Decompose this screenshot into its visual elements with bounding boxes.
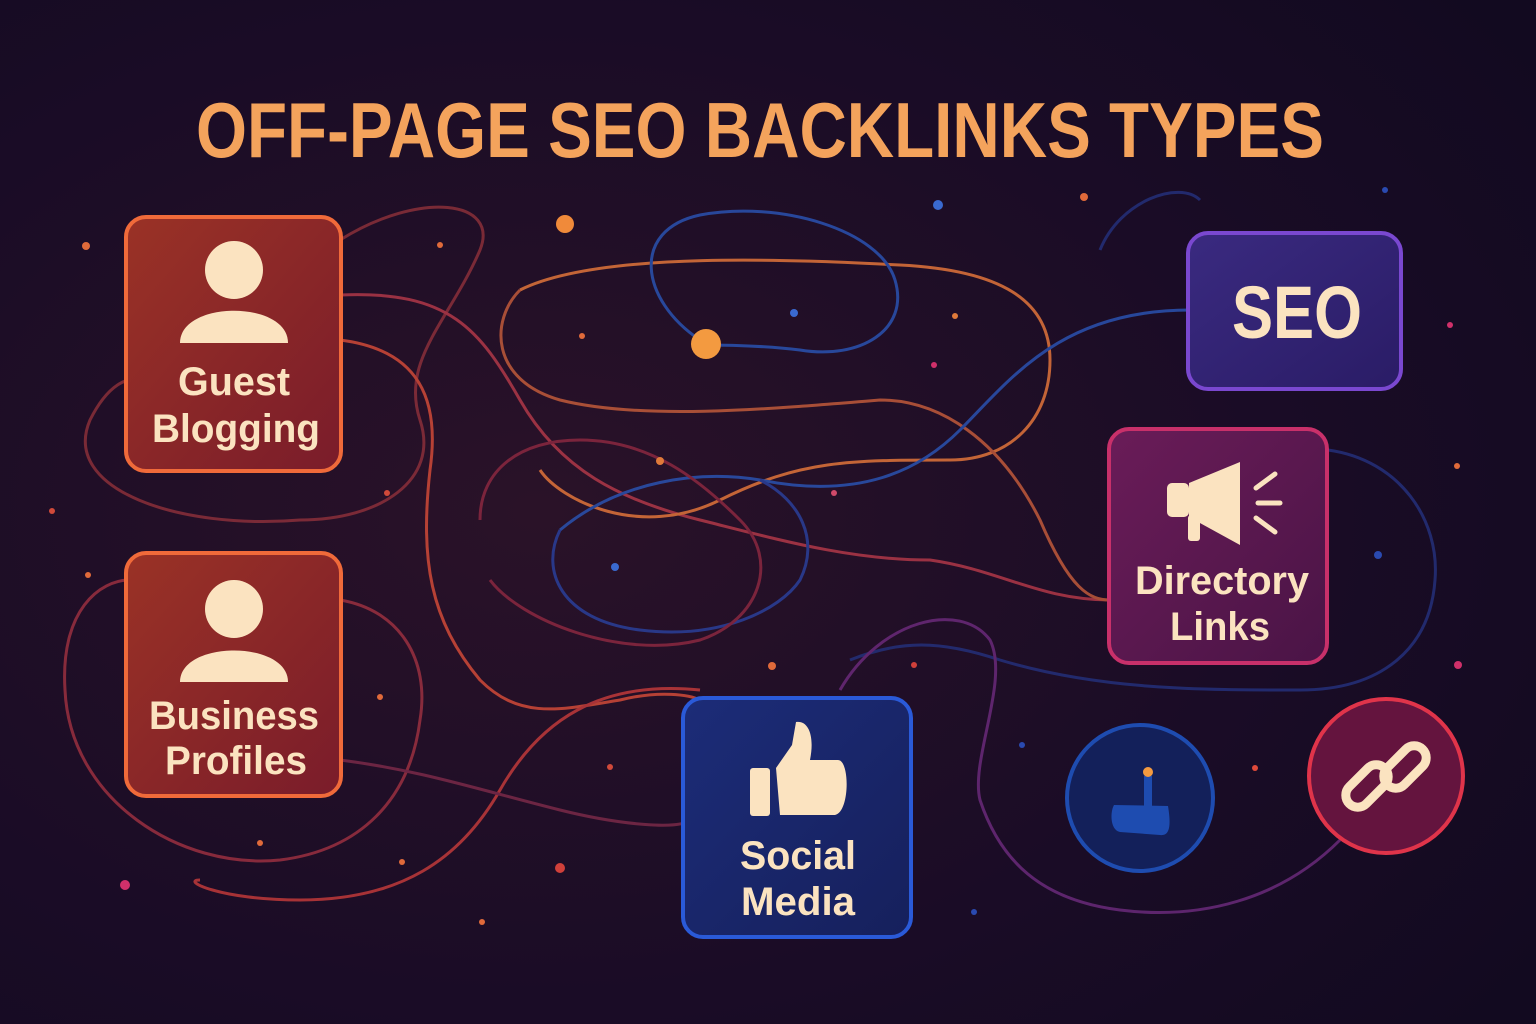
- panel: business profiles: [126, 553, 341, 796]
- panel: social media: [683, 698, 911, 937]
- panel: business profiles: Profiles: [165, 739, 307, 783]
- icon: megaphone: [1167, 462, 1280, 545]
- panel: directory links: [1109, 429, 1327, 663]
- panel: directory links: Directory: [1135, 559, 1310, 603]
- panel: seo: SEO: [1232, 271, 1362, 354]
- icon: person: [180, 580, 288, 682]
- panel: social media: Social: [740, 834, 856, 878]
- icon: link circle: [1309, 699, 1463, 853]
- icon: person: [180, 241, 288, 343]
- panel: guest blogging: [126, 217, 341, 471]
- panel: guest blogging: Guest: [178, 360, 290, 404]
- icon: blue circle joystick: [1067, 725, 1213, 871]
- panel: directory links: Links: [1170, 605, 1270, 649]
- icon: thumbs up: [750, 722, 847, 816]
- background lines: [65, 192, 1435, 912]
- panel: guest blogging: Blogging: [152, 407, 320, 451]
- panel: business profiles: Business: [149, 694, 319, 738]
- dots: [49, 187, 1462, 925]
- panel: social media: Media: [741, 880, 856, 924]
- title: OFF-PAGE SEO BACKLINKS TYPES: [196, 86, 1324, 174]
- panel: seo: [1188, 233, 1401, 389]
